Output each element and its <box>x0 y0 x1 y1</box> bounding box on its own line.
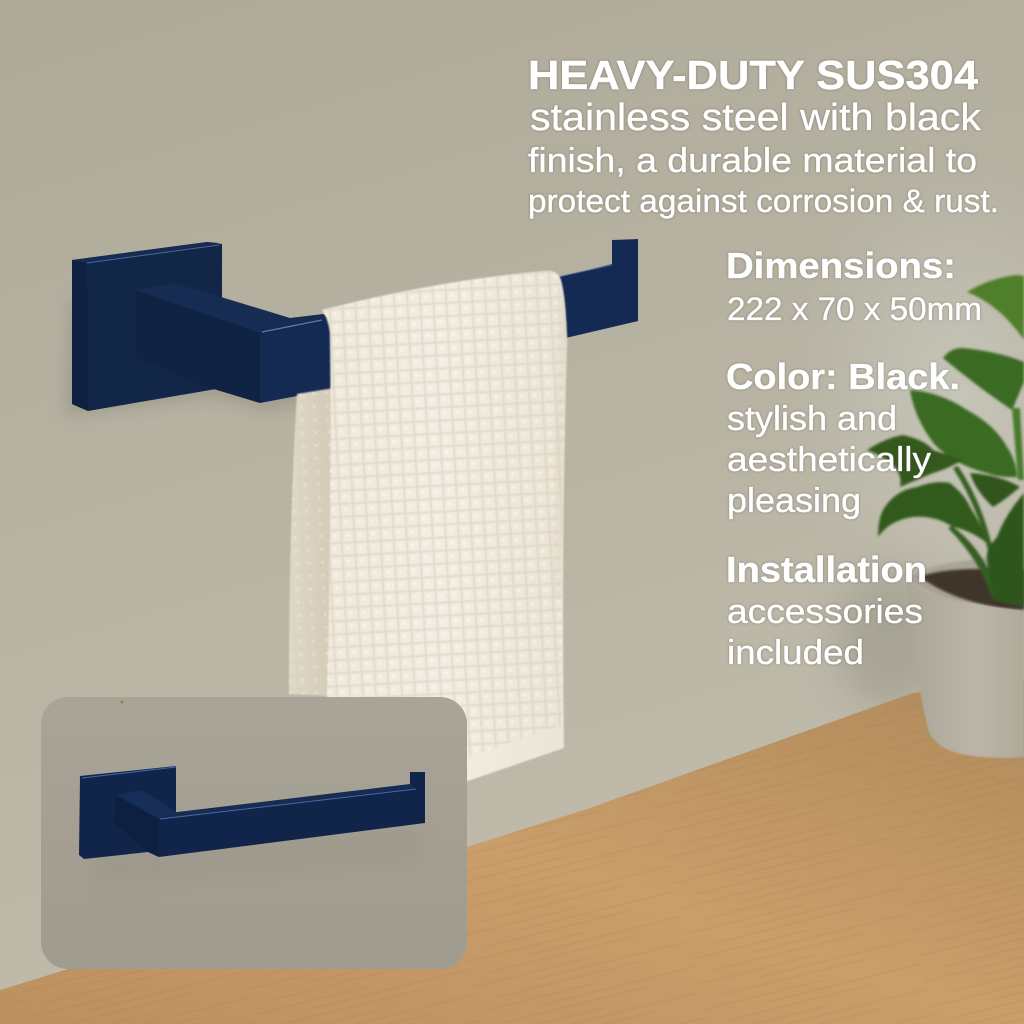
soil <box>920 569 1024 610</box>
plant leaves and stems <box>867 275 1024 607</box>
installation block: accessories <box>727 593 923 631</box>
inset photo panel <box>41 697 467 969</box>
color block: pleasing <box>727 482 861 520</box>
installation block: Installation <box>726 549 927 590</box>
color block: stylish and <box>727 400 897 438</box>
pot back rim <box>907 556 1024 612</box>
arm front face <box>260 317 334 403</box>
headline: HEAVY-DUTY SUS304 <box>528 52 978 98</box>
arm top face <box>135 283 332 334</box>
color block: Color: Black. <box>726 356 960 397</box>
fixture wall shadow <box>66 300 335 415</box>
inset towel bar <box>79 766 425 859</box>
main heading text <box>528 52 982 139</box>
dimensions block <box>726 245 982 327</box>
wall plate <box>72 242 222 411</box>
description lines: protect against corrosion & rust. <box>528 183 999 219</box>
color block <box>726 356 960 520</box>
towel fold shade <box>552 275 567 600</box>
inset soft shadow <box>90 825 420 885</box>
installation block: included <box>727 634 864 672</box>
arm side face <box>135 290 260 403</box>
far arm with upturned end <box>540 239 638 344</box>
potted plant <box>867 275 1024 758</box>
dimensions block: 222 x 70 x 50mm <box>727 291 982 327</box>
inset speck <box>120 700 124 704</box>
dimensions block: Dimensions: <box>726 245 956 286</box>
wooden shelf <box>0 680 1024 1024</box>
wall shade left of pot <box>840 570 940 710</box>
description lines <box>528 142 999 219</box>
color block: aesthetically <box>727 441 931 479</box>
wall light behind plant <box>790 160 1024 640</box>
inset background <box>41 697 467 969</box>
description lines: finish, a durable material to <box>528 142 977 180</box>
front towel layer <box>322 271 567 781</box>
towel bar: main fixture <box>72 239 638 411</box>
plate top edge <box>72 242 219 263</box>
plate left bevel <box>72 260 88 411</box>
rear towel layer <box>289 388 334 696</box>
installation block <box>726 549 927 672</box>
description line 1: stainless steel with black <box>530 97 982 139</box>
hanging towel <box>289 271 567 781</box>
pot body <box>906 580 1024 758</box>
